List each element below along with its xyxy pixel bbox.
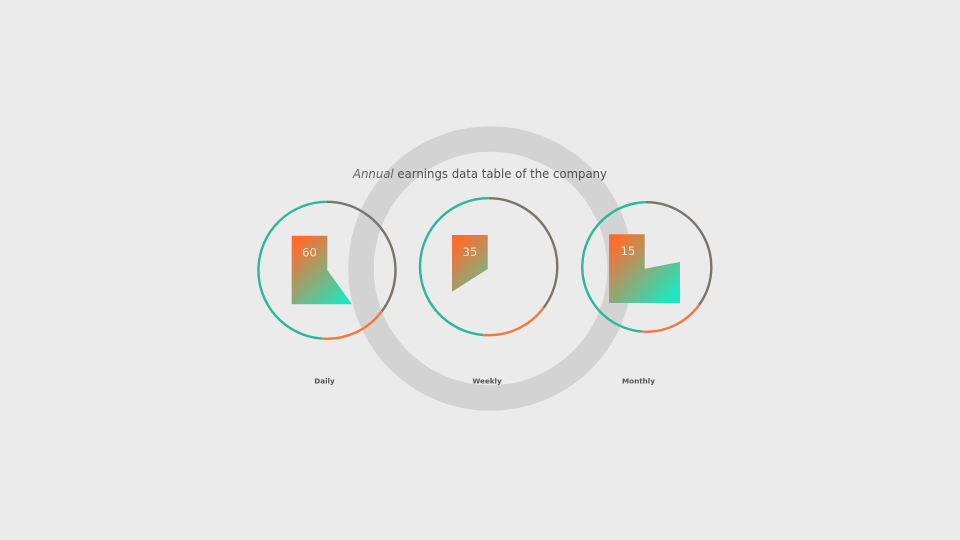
polar shape: weekly bbox=[452, 235, 488, 292]
value: 15: 15 bbox=[621, 244, 635, 258]
panel: weekly bbox=[420, 198, 557, 386]
title: Annual earnings data table of the company bbox=[352, 167, 607, 181]
label: Daily: Daily bbox=[314, 376, 335, 386]
ring chart: daily bbox=[258, 202, 395, 339]
value: 60: 60 bbox=[302, 246, 317, 260]
polar shape: monthly bbox=[609, 234, 680, 303]
panel: monthly bbox=[582, 202, 711, 386]
panel: daily bbox=[258, 202, 395, 386]
large background ring bbox=[361, 139, 620, 398]
value: 35: 35 bbox=[463, 245, 477, 259]
label: Monthly: Monthly bbox=[622, 376, 655, 386]
ring chart: weekly bbox=[420, 198, 557, 335]
polar shape: daily bbox=[292, 236, 352, 304]
ring chart: monthly bbox=[582, 202, 711, 332]
label: Weekly: Weekly bbox=[472, 376, 502, 386]
